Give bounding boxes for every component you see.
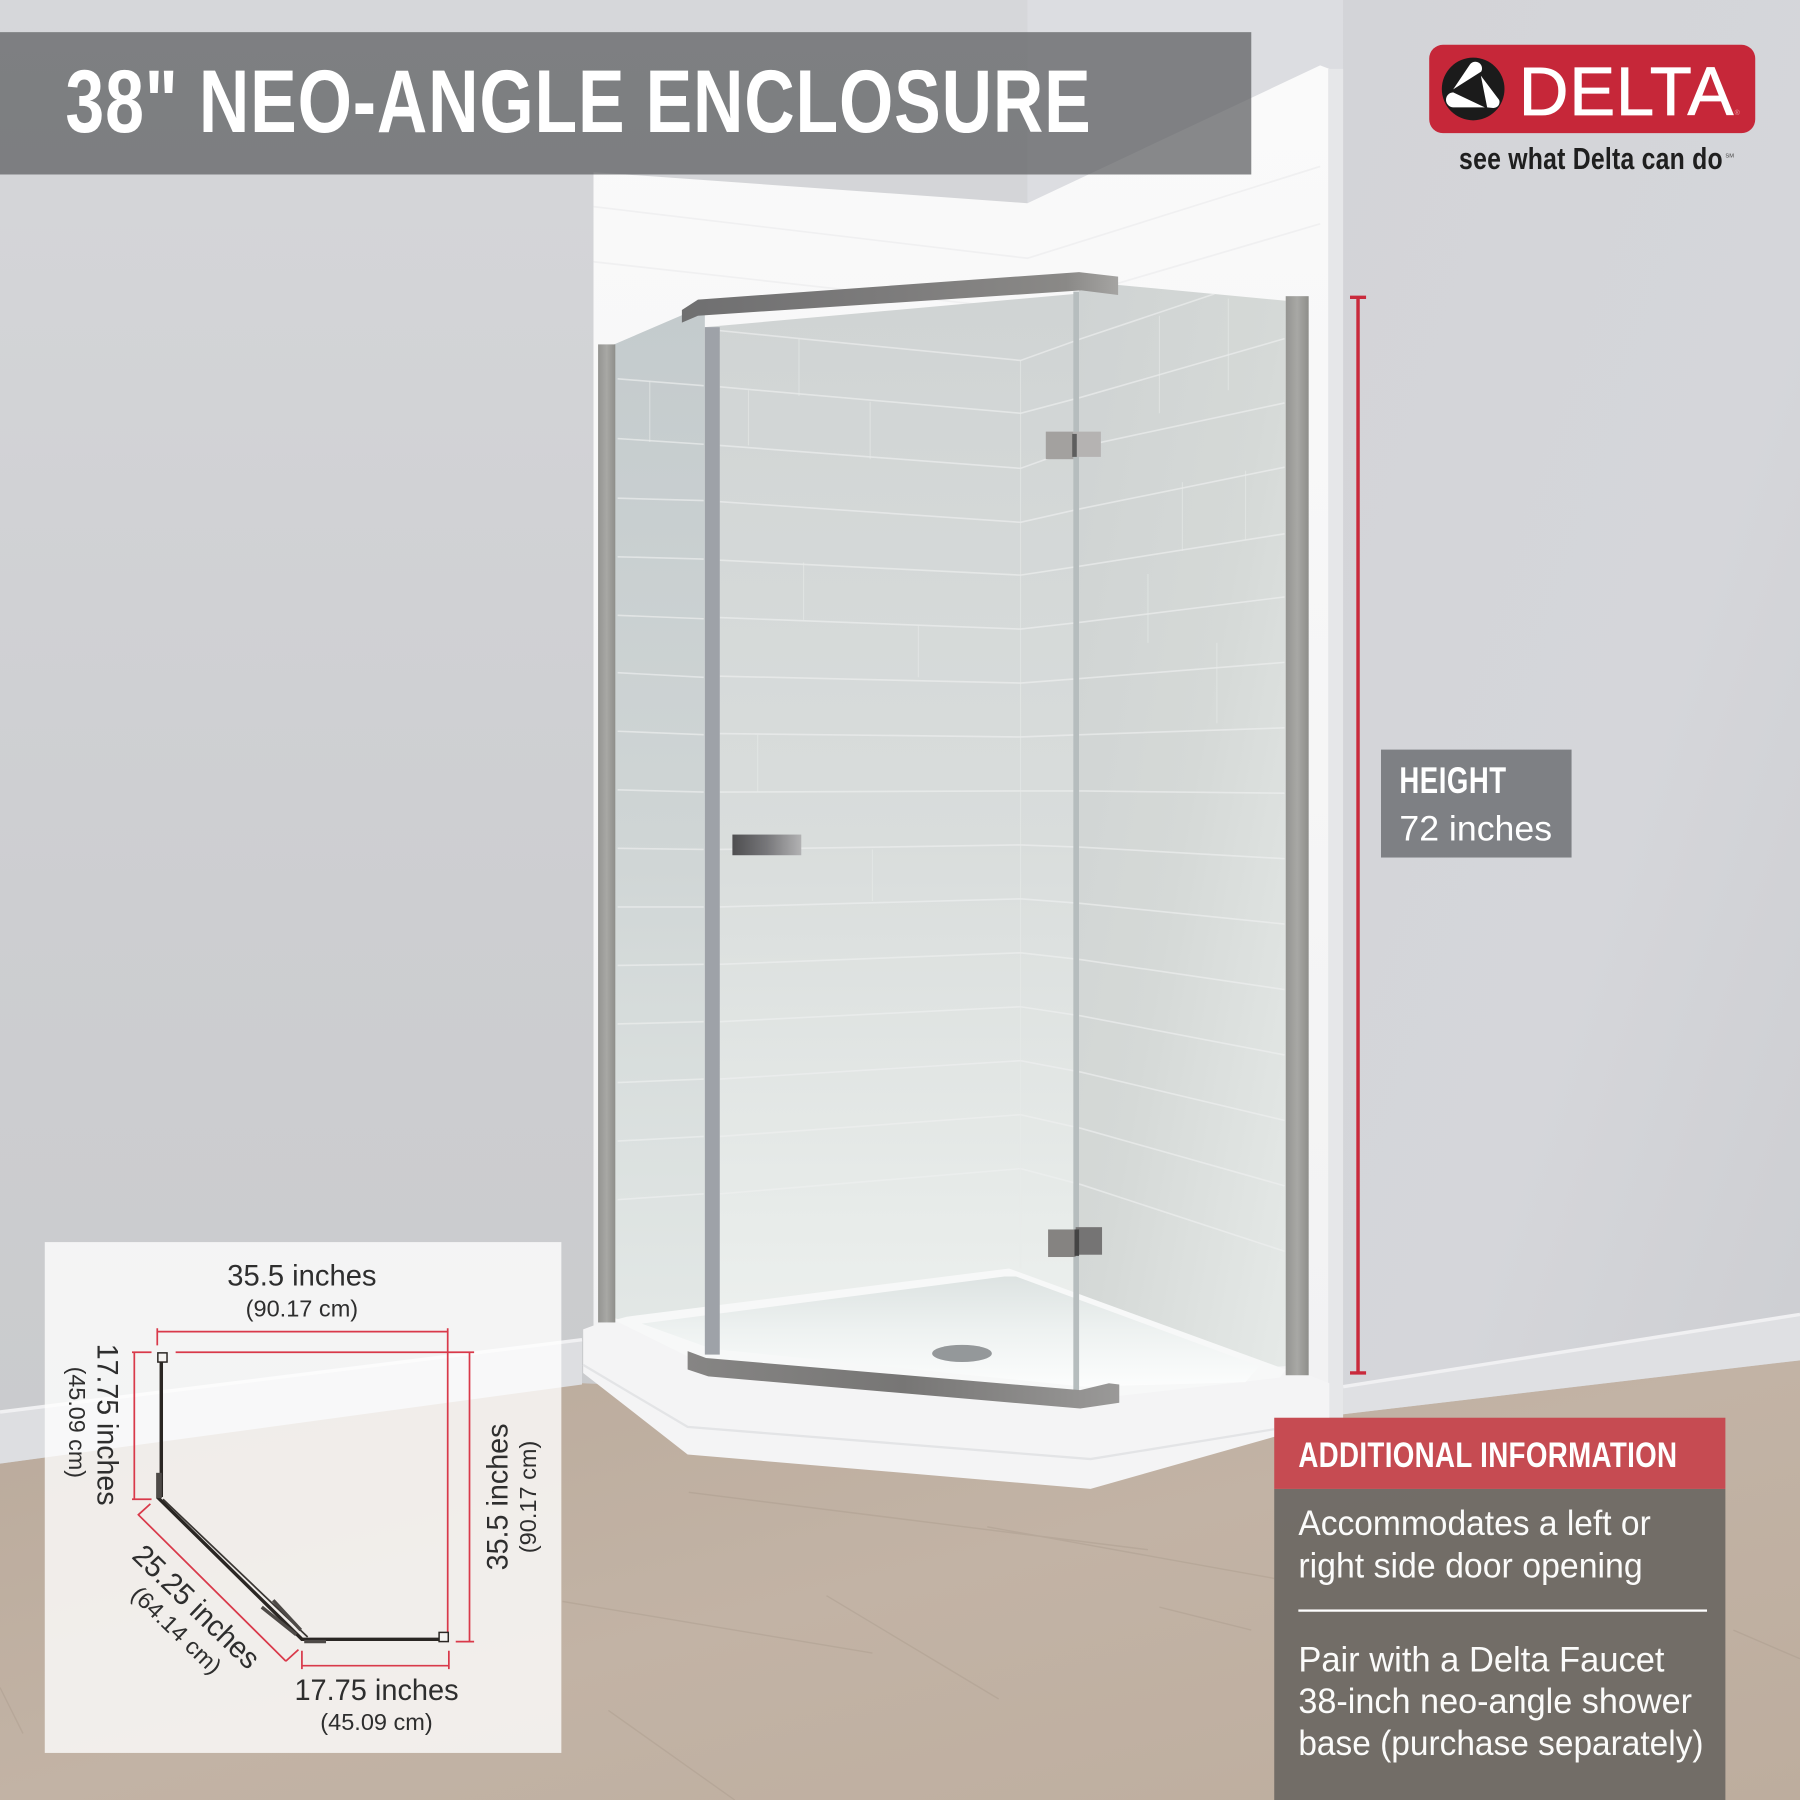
- panel: floor plan dimensions: (90.17 cm): [246, 1296, 358, 1322]
- left baseboard: [0, 1340, 582, 1464]
- bottom threshold rail: [688, 1351, 1119, 1409]
- right baseboard: [1343, 1314, 1800, 1414]
- shower base: [583, 1268, 1329, 1489]
- floor: [0, 1360, 1800, 1800]
- top header rail: [682, 272, 1118, 323]
- glass panel: right: [1079, 281, 1286, 1395]
- text: door opening: [1298, 1503, 1651, 1585]
- top hinge: [1046, 432, 1101, 459]
- shower enclosure: [583, 272, 1329, 1489]
- text: pairing note: Pair with a Delta Faucet: [1298, 1639, 1665, 1679]
- Delta logo: [1429, 45, 1755, 175]
- tagline: see what Delta can do: [1459, 141, 1723, 175]
- panel: floor plan dimensions: (64.14 cm): [126, 1581, 227, 1679]
- panel: floor plan dimensions: (90.17 cm): [515, 1441, 541, 1553]
- height callout: [1381, 750, 1572, 858]
- icon: Delta triangle mark: [1442, 58, 1504, 120]
- tagline: SM: [1725, 153, 1734, 159]
- text: pairing note: [1298, 1639, 1704, 1763]
- panel: floor plan dimensions: [45, 1242, 561, 1753]
- diagonal label: 25.25 inches: [126, 1539, 266, 1676]
- text: door opening: Accommodates a left or: [1298, 1503, 1651, 1543]
- door edge profile: [705, 327, 720, 1355]
- text: door opening: right side door opening: [1298, 1545, 1643, 1585]
- left side label: 17.75 inches: [91, 1344, 124, 1506]
- glass panel: door: [705, 294, 1076, 1395]
- hinge line: [1073, 292, 1079, 1394]
- door handle: [732, 835, 801, 855]
- title banner: [0, 32, 1251, 174]
- panel: floor plan dimensions: (45.09 cm): [320, 1709, 433, 1735]
- right wall channel: [1286, 296, 1309, 1375]
- right side label: 35.5 inches: [481, 1423, 514, 1570]
- bottom width label: 17.75 inches: [294, 1674, 459, 1707]
- title: 38" NEO-ANGLE ENCLOSURE: [65, 52, 1091, 152]
- top width label: 35.5 inches: [227, 1260, 377, 1293]
- height callout: HEIGHT: [1399, 760, 1506, 801]
- tile lines seen through the glass: [618, 294, 1285, 1268]
- panel header: ADDITIONAL INFORMATION: [1298, 1435, 1677, 1475]
- panel header: [1274, 1418, 1725, 1489]
- text: pairing note: 38-inch neo-angle shower: [1298, 1681, 1692, 1721]
- enclosure plan outline: [156, 1353, 448, 1642]
- wordmark: DELTA: [1519, 53, 1733, 130]
- red dimension lines: [132, 1328, 474, 1669]
- panel: additional information: [1274, 1418, 1725, 1800]
- height dimension line: [1350, 297, 1366, 1373]
- height callout: 72 inches: [1399, 808, 1552, 848]
- panel: floor plan dimensions: (45.09 cm): [64, 1367, 90, 1478]
- glass panel: left: [614, 312, 705, 1360]
- icon: drain: [932, 1345, 992, 1362]
- left wall channel: [598, 344, 615, 1322]
- registered mark: ®: [1735, 109, 1740, 117]
- text: pairing note: base (purchase separately): [1298, 1723, 1704, 1763]
- white tile surround: [593, 65, 1343, 1418]
- bottom hinge: [1048, 1227, 1102, 1257]
